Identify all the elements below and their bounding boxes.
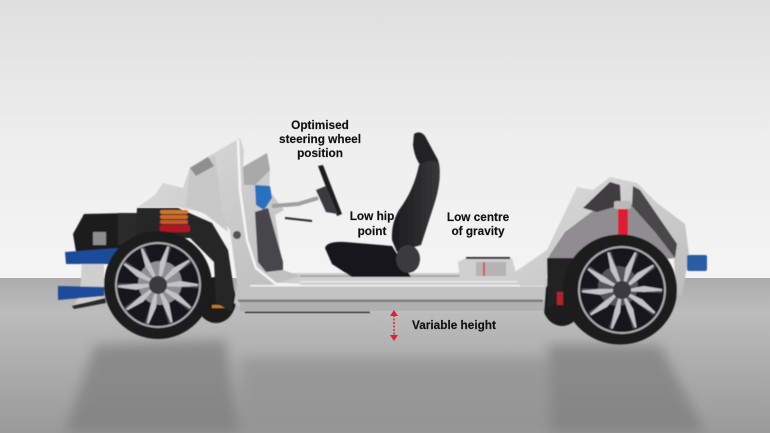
front spring bbox=[160, 210, 190, 232]
blue steering box bbox=[255, 185, 272, 210]
floor reflections bbox=[65, 340, 705, 433]
backrest bbox=[392, 161, 440, 252]
label: optimised steering wheel position: steering wheel bbox=[279, 132, 361, 146]
rear body shell bbox=[512, 177, 707, 308]
rear arch inner panel bbox=[548, 204, 675, 262]
recliner bbox=[396, 245, 420, 273]
rear red strut bbox=[618, 209, 628, 236]
pillar interior bbox=[255, 208, 283, 272]
floor bbox=[0, 278, 770, 433]
label: low hip point: point bbox=[358, 224, 386, 238]
floor orange link bbox=[212, 305, 231, 308]
shell shadow panels bbox=[186, 155, 228, 232]
label: optimised steering wheel position: Optimised bbox=[291, 118, 349, 132]
front suspension and engine assembly bbox=[58, 213, 140, 309]
rear wheel bbox=[563, 234, 677, 344]
rear arch opening bbox=[547, 258, 578, 308]
battery pack bbox=[458, 257, 516, 280]
blue crossmember bbox=[65, 248, 118, 264]
rear blue bumper mount bbox=[687, 255, 707, 271]
seat bbox=[325, 132, 440, 277]
label: low centre of gravity: Low centre bbox=[447, 210, 510, 224]
label: optimised steering wheel position: position bbox=[297, 146, 343, 160]
steering column and wheel bbox=[272, 165, 342, 221]
label: low centre of gravity: of gravity bbox=[451, 224, 505, 238]
pillar highlight bbox=[238, 140, 300, 285]
brake detail bbox=[557, 292, 563, 305]
lower arm bbox=[72, 298, 106, 309]
front body shell bbox=[135, 138, 300, 312]
floor pan bbox=[262, 273, 520, 287]
engine block bbox=[73, 213, 140, 252]
label: variable height: Variable height bbox=[412, 318, 496, 332]
front far wheel bbox=[196, 277, 236, 323]
rear arch dark bands bbox=[583, 182, 621, 212]
rear far wheel bbox=[542, 278, 582, 326]
front wheel bbox=[104, 231, 212, 339]
label: low hip point: Low hip bbox=[350, 209, 394, 223]
wheel arch liner bbox=[135, 208, 234, 312]
arrow: variable height bbox=[390, 310, 398, 341]
floor sill bbox=[234, 285, 546, 313]
headrest bbox=[413, 132, 439, 167]
cushion bbox=[325, 242, 411, 277]
wall background bbox=[0, 0, 770, 279]
silver brackets bbox=[74, 260, 104, 304]
